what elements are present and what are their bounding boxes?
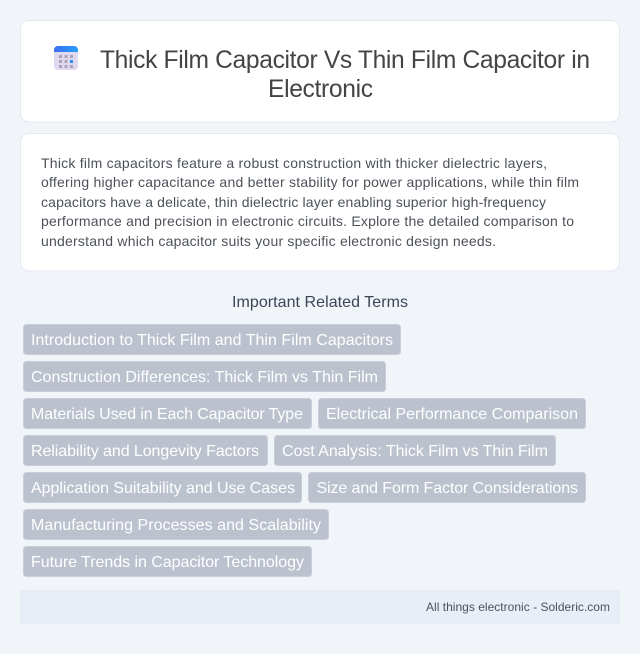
text block: description: performance and precision in electronic circuits. Explore the detailed comparison to bbox=[41, 213, 574, 229]
tag: future bbox=[24, 546, 312, 576]
tag: size: Size and Form Factor Considerations bbox=[316, 480, 578, 497]
title: Thick Film Capacitor Vs Thin Film Capacitor in bbox=[100, 47, 590, 74]
tag: materials: Materials Used in Each Capacitor Type bbox=[31, 406, 303, 423]
title: Electronic bbox=[268, 76, 373, 103]
tag: future: Future Trends in Capacitor Technology bbox=[31, 554, 304, 571]
footer bbox=[20, 590, 620, 624]
title bbox=[100, 47, 590, 103]
text block: description bbox=[41, 155, 579, 249]
tag: manufacturing: Manufacturing Processes and Scalability bbox=[31, 517, 321, 534]
tag: construction bbox=[24, 362, 386, 392]
tag: application: Application Suitability and Use Cases bbox=[31, 480, 295, 497]
tag: construction: Construction Differences: Thick Film vs Thin Film bbox=[31, 369, 378, 386]
tag: reliability: Reliability and Longevity Factors bbox=[31, 443, 259, 460]
tag: application bbox=[24, 472, 302, 502]
heading: related terms: Important Related Terms bbox=[232, 294, 408, 311]
tag: cost bbox=[274, 436, 556, 466]
tag: manufacturing bbox=[24, 510, 328, 540]
text block: description: understand which capacitor suits your specific electronic design needs. bbox=[41, 233, 496, 249]
text block: description: capacitors have a delicate, thin dielectric layer enabling superior high-frequency bbox=[41, 194, 546, 210]
tag: introduction: Introduction to Thick Film and Thin Film Capacitors bbox=[31, 332, 393, 349]
icon: calendar bbox=[54, 46, 78, 70]
panel: header card bbox=[20, 20, 620, 122]
tag: electrical bbox=[318, 398, 586, 428]
tag: introduction bbox=[24, 324, 400, 354]
tag: electrical: Electrical Performance Comparison bbox=[326, 406, 578, 423]
text block: description: offering higher capacitance and better stability for power applications, while thin film bbox=[41, 174, 579, 190]
tag: materials bbox=[24, 398, 312, 428]
panel: description card bbox=[20, 134, 620, 271]
text block: description: Thick film capacitors feature a robust construction with thicker dielectric layers, bbox=[41, 155, 547, 171]
tag: cost: Cost Analysis: Thick Film vs Thin Film bbox=[282, 443, 548, 460]
footer: All things electronic - Solderic.com bbox=[426, 600, 610, 614]
tag: reliability bbox=[24, 436, 268, 466]
tag list bbox=[24, 324, 586, 576]
tag: size bbox=[308, 472, 586, 502]
